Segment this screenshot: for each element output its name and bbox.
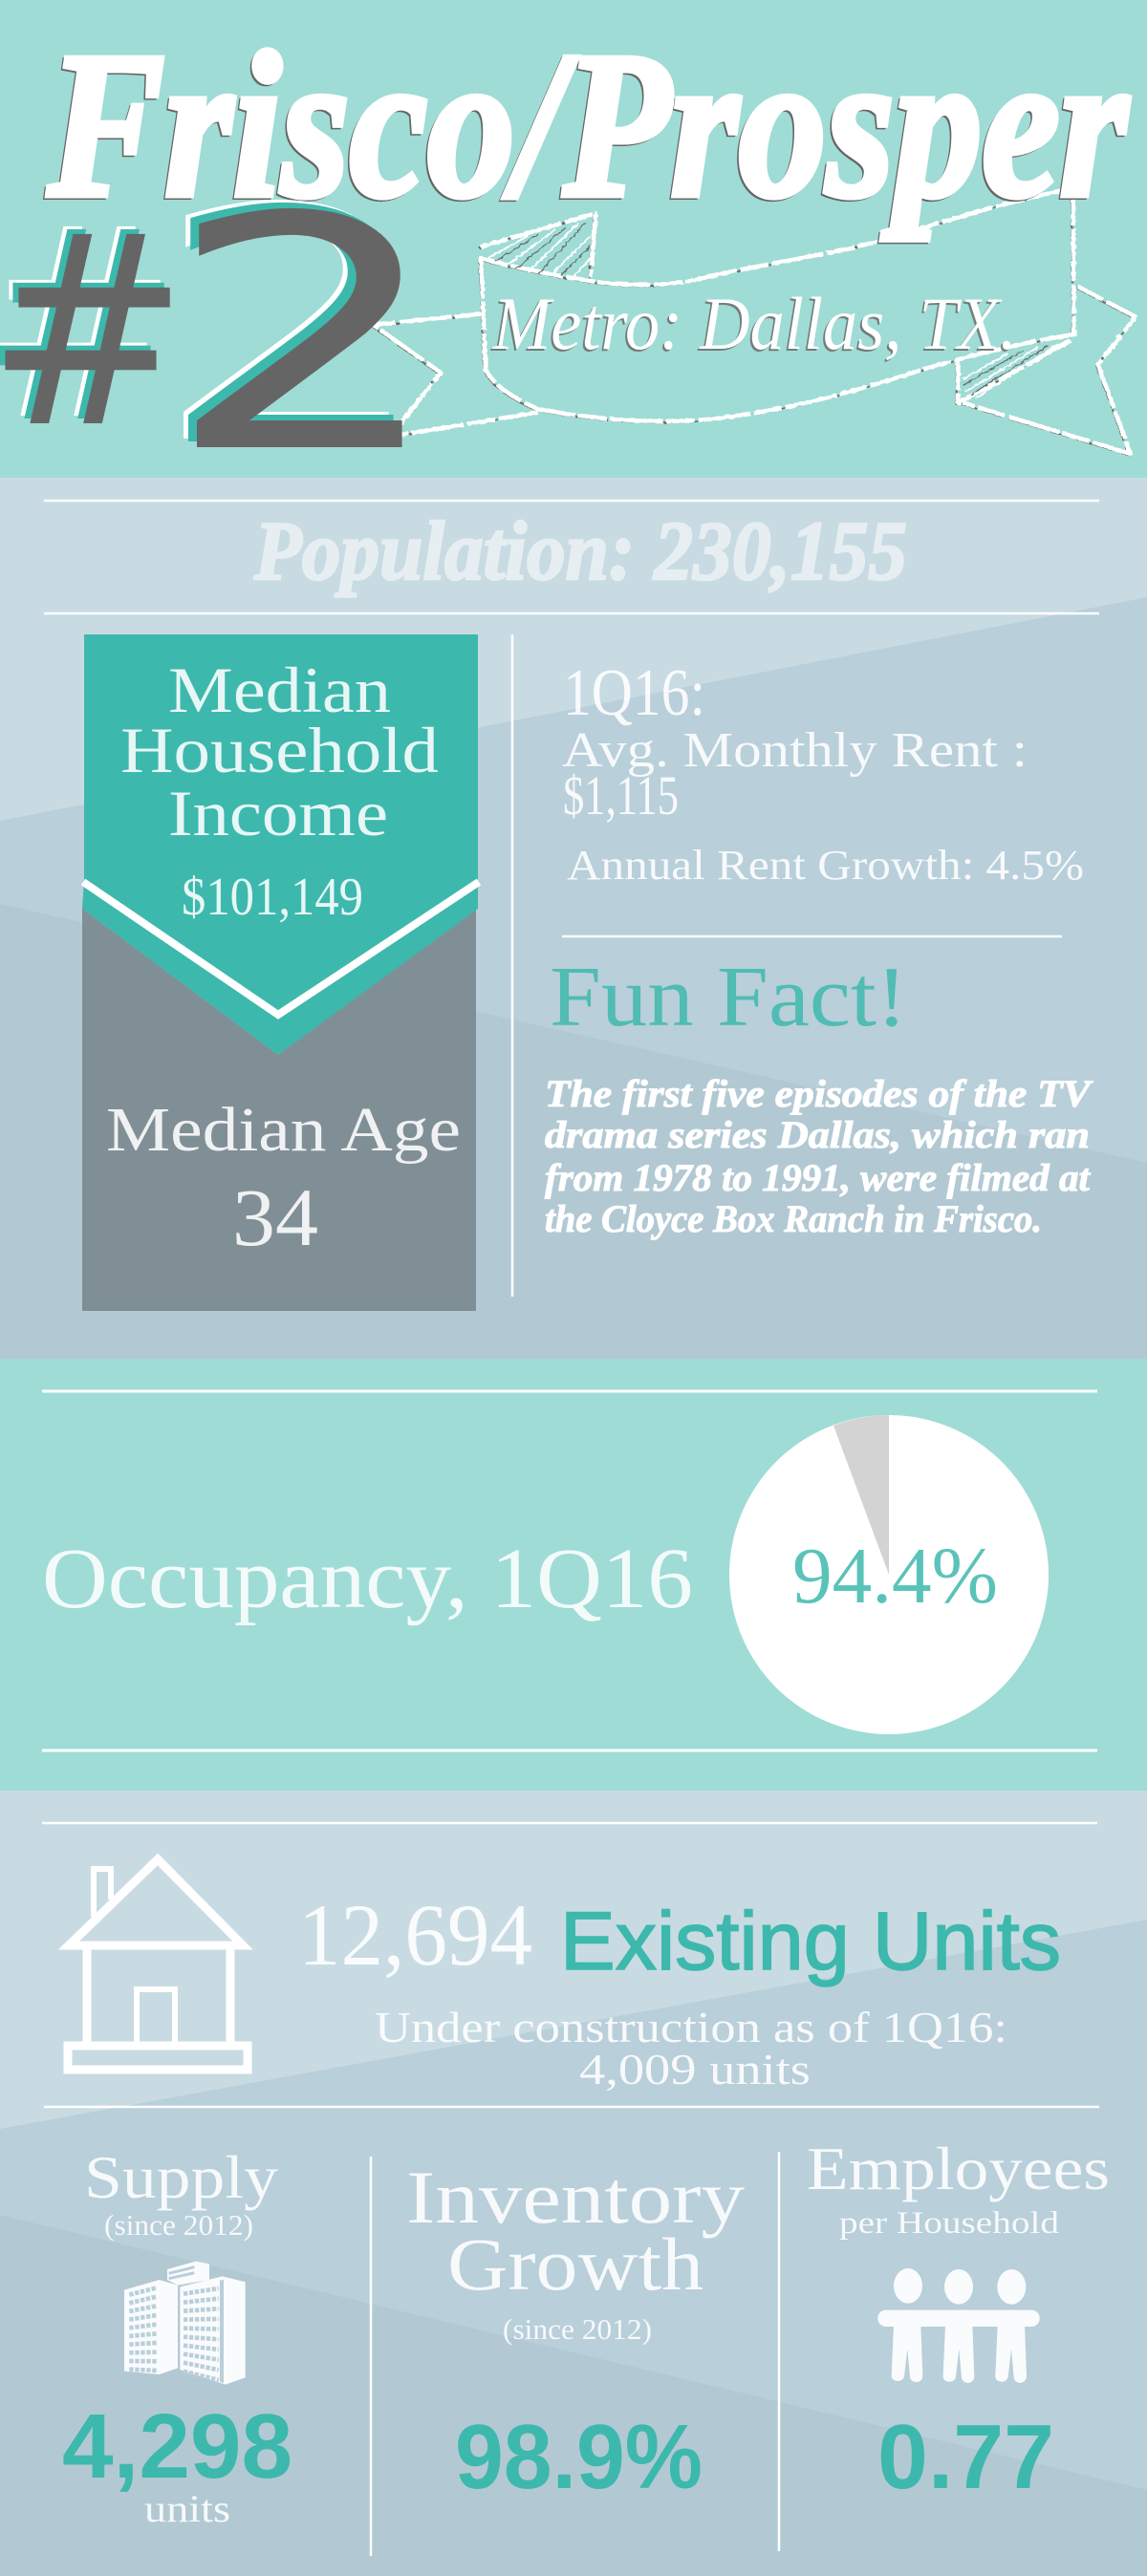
median income block <box>82 634 479 1055</box>
metro label shadow: Metro: Dallas, TX. <box>490 284 1015 367</box>
under construction note: Under construction as of 1Q16: <box>375 2003 1007 2051</box>
rank: #2: 2 <box>164 149 446 524</box>
rank: #2 <box>0 140 446 524</box>
column: inventory growth: Inventory <box>406 2156 745 2239</box>
panel: occupancy <box>0 1359 1147 1791</box>
banner: metro ribbon sketch <box>372 188 1136 455</box>
existing units label: Existing Units <box>560 1896 1061 1987</box>
column: inventory growth <box>406 2156 763 2508</box>
column: employees per household <box>807 2135 1110 2508</box>
median age value: 34 <box>232 1171 318 1263</box>
median age block <box>82 909 476 1311</box>
pie value: 94.4% <box>792 1532 998 1621</box>
income label: Median <box>168 654 391 726</box>
pie chart <box>729 1415 1049 1734</box>
existing units count: 12,694 <box>298 1886 532 1984</box>
column: employees per household: per Household <box>839 2206 1060 2241</box>
rent stats: Annual Rent Growth: 4.5% <box>567 842 1084 889</box>
column: supply: Supply <box>84 2143 278 2211</box>
income value: $101,149 <box>182 868 363 927</box>
under construction note: 4,009 units <box>579 2045 811 2093</box>
median age label: Median Age <box>106 1095 461 1165</box>
rank: #2: 2 <box>156 143 438 518</box>
column: inventory growth: Growth <box>447 2222 703 2306</box>
panel: demographics and rent <box>0 478 1147 1359</box>
column: inventory growth: (since 2012) <box>503 2312 652 2346</box>
fun fact text: drama series Dallas, which ran <box>545 1113 1090 1156</box>
rent stats: Avg. Monthly Rent : <box>562 723 1028 778</box>
population heading: Population: 230,155 <box>253 505 907 598</box>
fun fact text: the Cloyce Box Ranch in Frisco. <box>545 1197 1042 1240</box>
column: supply: units <box>144 2487 230 2530</box>
employees value: 0.77 <box>877 2406 1054 2508</box>
icon: apartment buildings <box>124 2262 246 2385</box>
income label: Household <box>120 714 439 786</box>
supply value: 4,298 <box>62 2395 292 2498</box>
occupancy label: Occupancy, 1Q16 <box>42 1532 693 1626</box>
icon: three people <box>877 2268 1040 2383</box>
column: supply: (since 2012) <box>104 2208 253 2242</box>
column: employees per household: Employees <box>807 2135 1110 2202</box>
rent stats: 1Q16: <box>563 656 705 730</box>
fun fact text: from 1978 to 1991, were filmed at <box>545 1156 1092 1199</box>
fun fact text: The first five episodes of the TV <box>545 1072 1093 1115</box>
income label: Income <box>168 777 388 849</box>
metro label: Metro: Dallas, TX. <box>492 282 1017 365</box>
panel: units and supply <box>0 1791 1147 2576</box>
panel: header band <box>0 0 1147 524</box>
rent stats <box>562 656 1084 889</box>
rent stats: $1,115 <box>563 764 679 826</box>
icon: house <box>68 1859 248 2070</box>
column: supply <box>62 2143 292 2530</box>
inventory growth value: 98.9% <box>455 2406 703 2508</box>
fun fact heading: Fun Fact! <box>550 950 907 1044</box>
rank: #2: 2 <box>151 140 433 515</box>
